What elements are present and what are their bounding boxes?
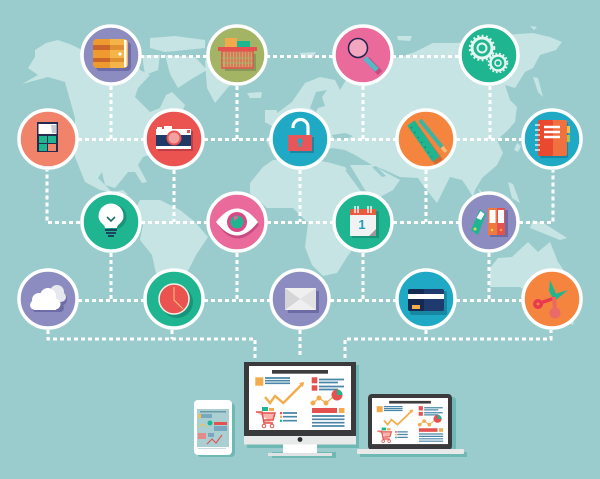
icon: ruler and pencil [397, 110, 455, 168]
laptop [357, 394, 467, 457]
tablet [194, 400, 235, 457]
icon: eye [208, 193, 266, 251]
icon: binders [460, 193, 518, 251]
icon: calendar [334, 193, 392, 251]
inner seas [310, 90, 386, 190]
connector lines [47, 56, 553, 358]
world map [22, 26, 575, 325]
icon: open padlock [271, 110, 329, 168]
icon: camera [145, 110, 203, 168]
icon: magnifier [334, 26, 392, 84]
laptop dashboard [372, 398, 448, 444]
icon: shopping basket [208, 26, 266, 84]
icon: notebook [523, 110, 581, 168]
icon: envelope [271, 270, 329, 328]
icon: wallet [82, 26, 140, 84]
desktop monitor [244, 362, 359, 458]
icon: cloud [19, 270, 77, 328]
icon: light bulb [82, 193, 140, 251]
icon: gears [460, 26, 518, 84]
icon: credit card [397, 270, 455, 328]
icon: calendar: 1 [358, 217, 366, 232]
icon: calculator [19, 110, 77, 168]
monitor dashboard [249, 366, 351, 430]
icon: clock [145, 270, 203, 328]
icon: scissors [523, 270, 581, 328]
